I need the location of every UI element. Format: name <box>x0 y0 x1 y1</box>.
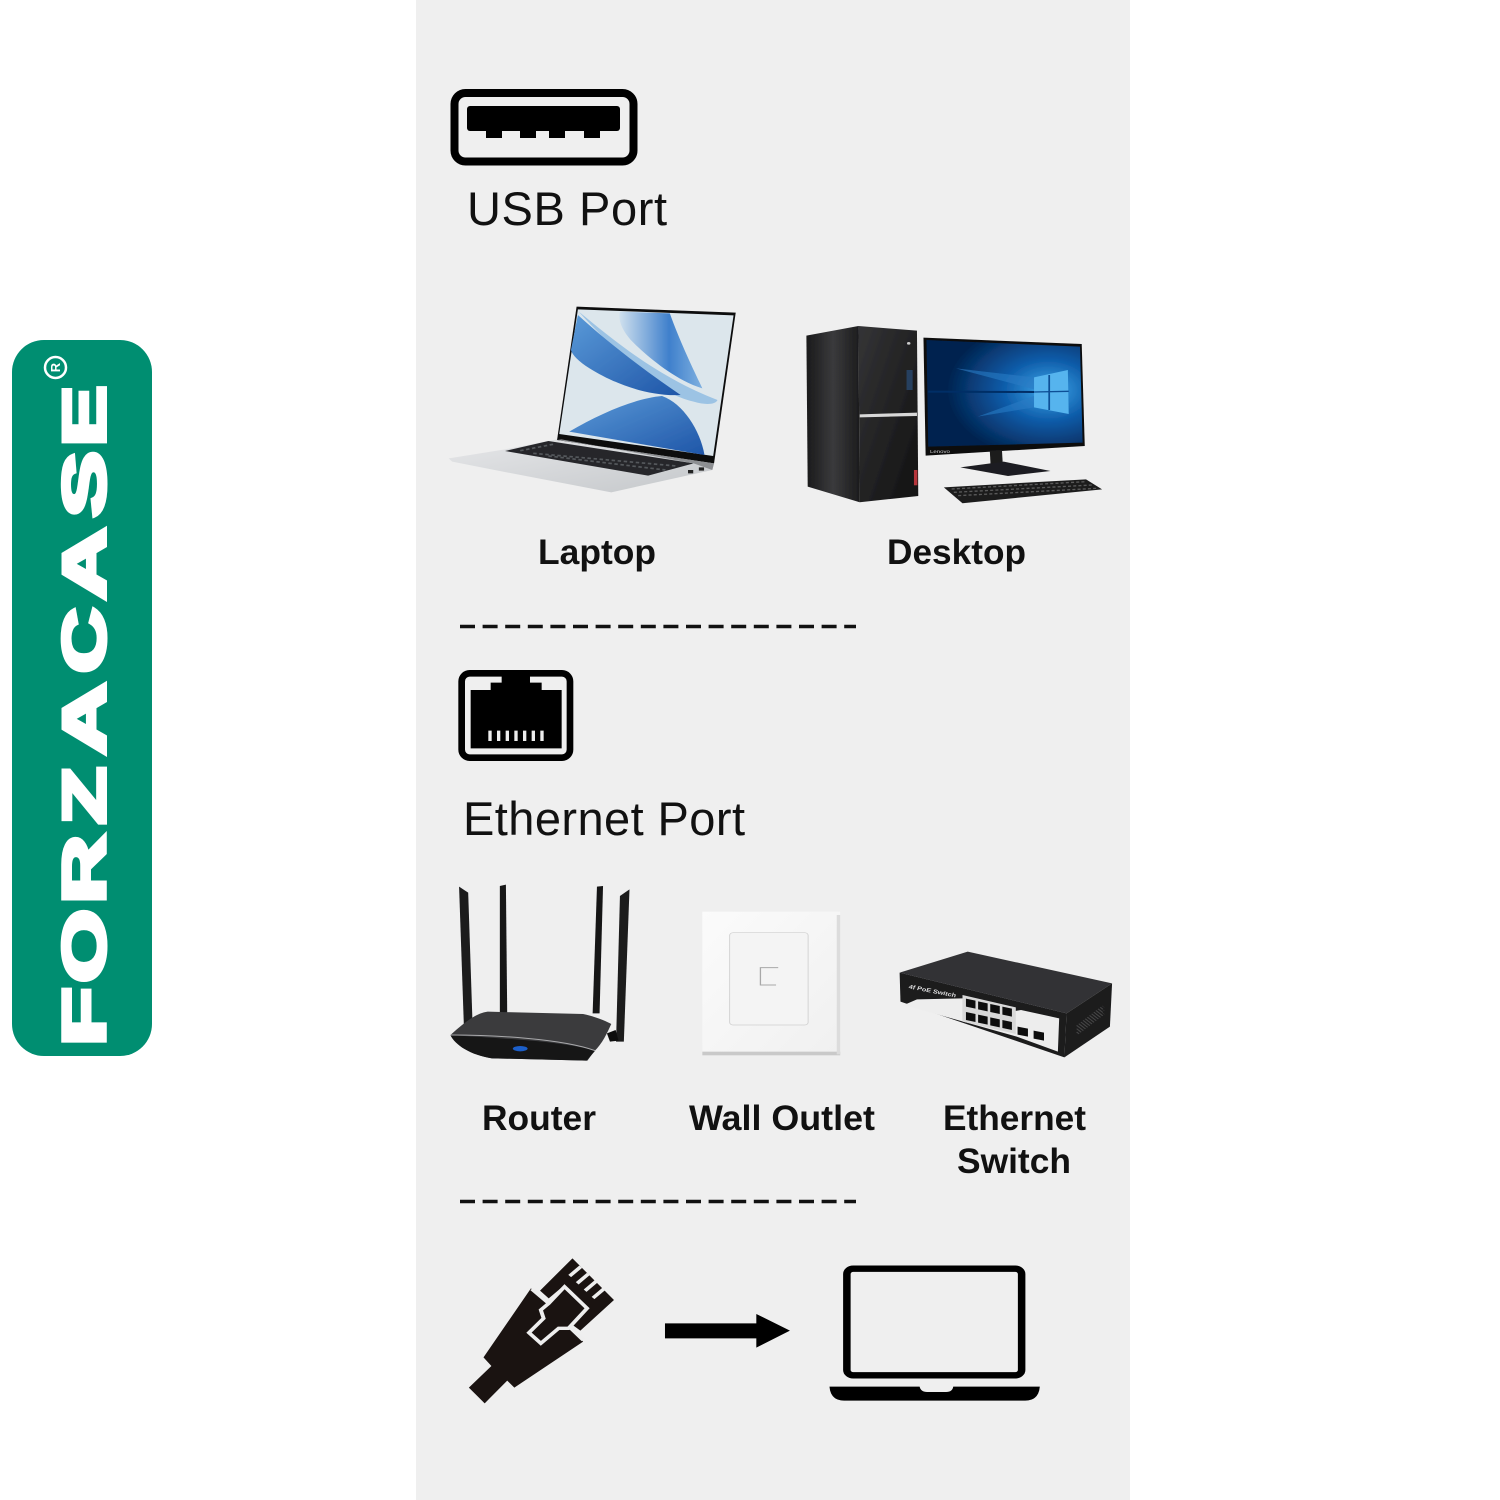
brand logo tab <box>12 340 152 1056</box>
image: wall outlet <box>702 912 840 1055</box>
label: Router: Router <box>482 1099 596 1138</box>
brand logo tab: Z <box>51 767 118 824</box>
image: Ethernet switch: 4f PoE Switch <box>908 984 957 999</box>
brand logo tab: E <box>51 386 118 446</box>
arrow <box>665 1314 790 1348</box>
label: Laptop: Laptop <box>538 533 656 572</box>
brand logo tab: A <box>52 528 118 600</box>
brand logo tab: A <box>52 683 118 755</box>
label: Wall Outlet: Wall Outlet <box>689 1099 875 1138</box>
brand logo tab: R <box>51 835 118 904</box>
icon: USB port <box>454 93 634 162</box>
heading: Ethernet Port: Ethernet Port <box>463 792 745 845</box>
image: desktop computer: Lenovo <box>930 450 950 455</box>
label: Ethernet Switch: Switch <box>957 1142 1071 1181</box>
image: desktop computer <box>806 326 1102 503</box>
icon: Ethernet cable plug <box>469 1258 614 1403</box>
brand logo tab: R <box>48 362 63 372</box>
label: Ethernet Switch: Ethernet <box>943 1099 1086 1138</box>
image: laptop <box>449 307 736 492</box>
image: router <box>450 885 629 1061</box>
brand logo tab: F <box>51 987 118 1046</box>
brand logo tab: S <box>52 451 118 517</box>
brand logo tab: C <box>51 608 118 673</box>
label: Ethernet Switch <box>943 1099 1086 1181</box>
background panel <box>416 0 1130 1500</box>
icon: Ethernet port <box>462 673 570 758</box>
label: Desktop: Desktop <box>887 533 1026 572</box>
brand logo tab: O <box>51 909 118 983</box>
icon: laptop outline <box>829 1269 1040 1401</box>
heading: USB Port: USB Port <box>467 182 667 235</box>
image: Ethernet switch <box>900 952 1112 1057</box>
